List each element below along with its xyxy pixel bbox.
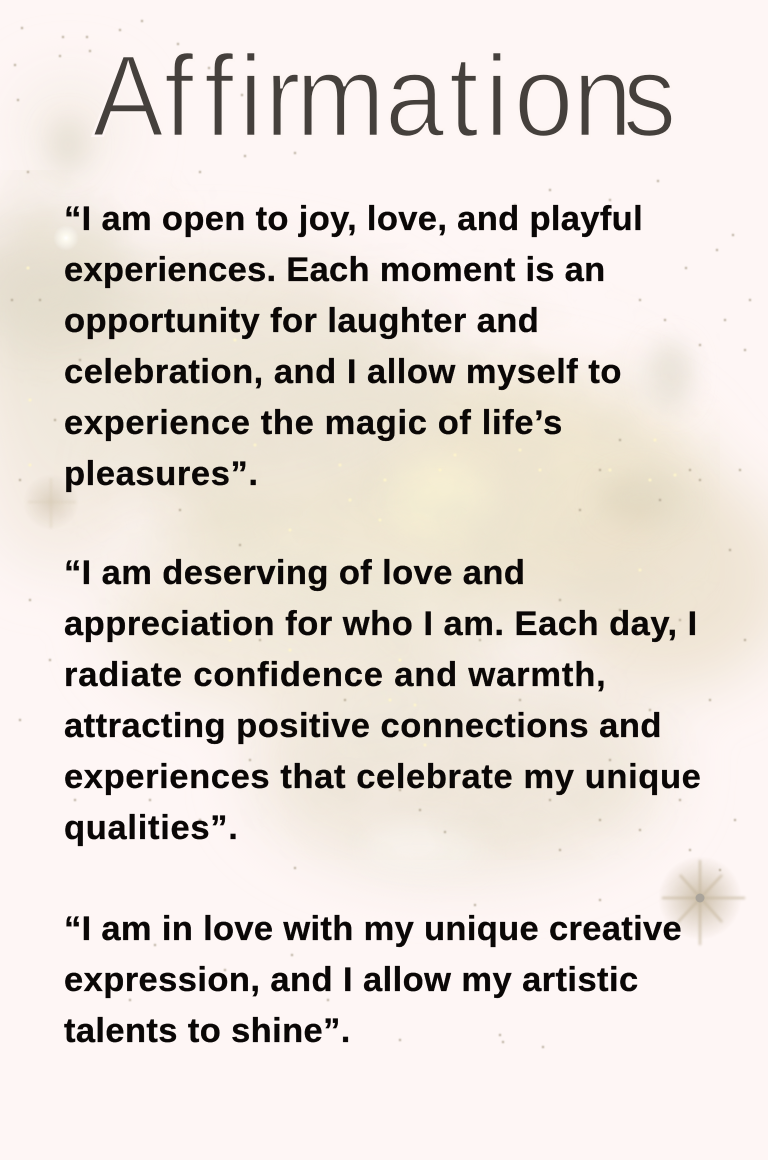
affirmation 3: expression, and I allow my artistic	[64, 961, 639, 999]
affirmation 2	[64, 554, 701, 847]
stars: pale golden sparkles	[28, 268, 675, 745]
affirmation 2: qualities”.	[64, 809, 238, 847]
affirmation 3: talents to shine”.	[64, 1012, 351, 1050]
affirmation 3: “I am in love with my unique creative	[64, 910, 682, 948]
affirmation 1: pleasures”.	[64, 455, 259, 493]
affirmation 1: “I am open to joy, love, and playful	[64, 200, 643, 238]
affirmation 1	[64, 200, 643, 493]
affirmation 1: experience the magic of life’s	[64, 404, 563, 442]
affirmation 1: celebration, and I allow myself to	[64, 353, 622, 391]
affirmation 2: radiate confidence and warmth,	[64, 656, 607, 694]
icon: bright star upper left	[53, 225, 79, 251]
nebula clouds	[0, 80, 768, 875]
affirmation 1: opportunity for laughter and	[64, 302, 539, 340]
icon: starburst lower right	[658, 856, 745, 945]
affirmation 3	[64, 910, 682, 1050]
affirmation 2: attracting positive connections and	[64, 707, 662, 745]
affirmation 1: experiences. Each moment is an	[64, 251, 605, 289]
title: Affirmations	[92, 31, 676, 161]
icon: starburst left	[23, 474, 79, 530]
affirmation 2: appreciation for who I am. Each day, I	[64, 605, 698, 643]
affirmation 2: “I am deserving of love and	[64, 554, 525, 592]
affirmation 2: experiences that celebrate my unique	[64, 758, 701, 796]
